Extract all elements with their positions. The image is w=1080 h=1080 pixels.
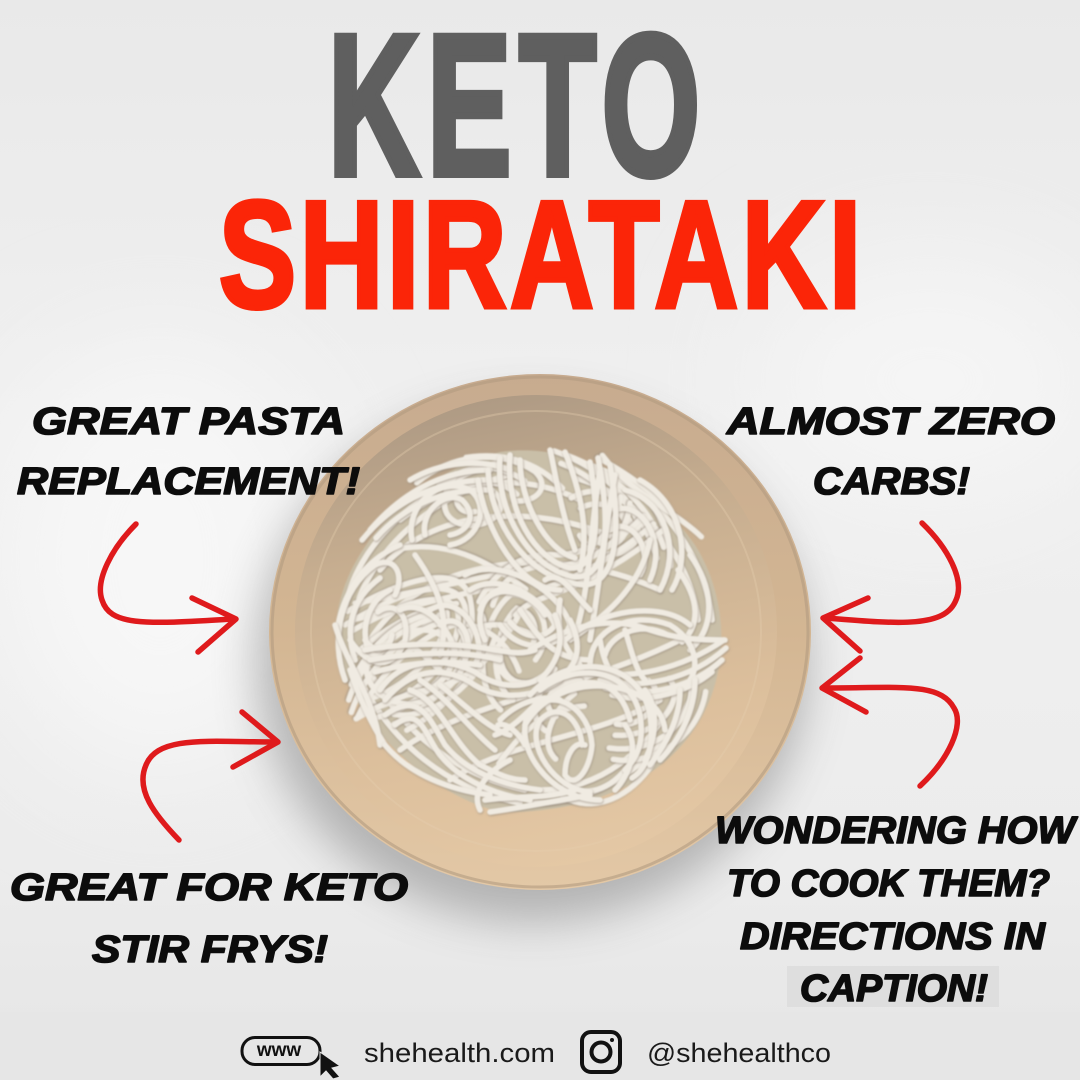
arrow: zero carbs to bowl <box>823 523 958 651</box>
arrow: stir frys to bowl <box>143 712 278 840</box>
callout: almost zero carbs <box>726 401 1055 503</box>
callout: great for keto stir frys <box>10 867 408 971</box>
bowl of shirataki noodles <box>256 374 811 922</box>
callout: how to cook: DIRECTIONS IN <box>740 916 1047 958</box>
callout: how to cook: CAPTION! <box>800 968 988 1010</box>
icon: www cursor: www <box>256 1040 301 1061</box>
callout: great for keto stir frys: GREAT FOR KETO <box>10 867 408 909</box>
callout: how to cook: TO COOK THEM? <box>727 863 1050 905</box>
callout: almost zero carbs: CARBS! <box>813 461 970 503</box>
arrow: pasta replacement to bowl <box>100 524 236 652</box>
title: SHIRATAKI: SHIRATAKI <box>219 170 865 340</box>
icon: instagram <box>582 1032 620 1072</box>
noodles <box>303 402 745 825</box>
callout: great pasta replacement: REPLACEMENT! <box>17 461 360 503</box>
callout: great pasta replacement <box>17 401 360 503</box>
footer <box>242 1032 831 1079</box>
callout: how to cook: WONDERING HOW <box>715 810 1078 852</box>
icon: www cursor <box>242 1038 340 1079</box>
bowl shadow <box>256 402 808 922</box>
website: shehealth.com <box>364 1038 555 1068</box>
instagram handle: @shehealthco <box>647 1038 831 1068</box>
callout: great pasta replacement: GREAT PASTA <box>32 401 345 443</box>
bowl rim <box>269 374 811 890</box>
callout: great for keto stir frys: STIR FRYS! <box>92 929 328 971</box>
callout: how to cook <box>715 810 1078 1010</box>
arrow: how to cook to bowl <box>822 658 957 786</box>
callout: almost zero carbs: ALMOST ZERO <box>726 401 1055 443</box>
